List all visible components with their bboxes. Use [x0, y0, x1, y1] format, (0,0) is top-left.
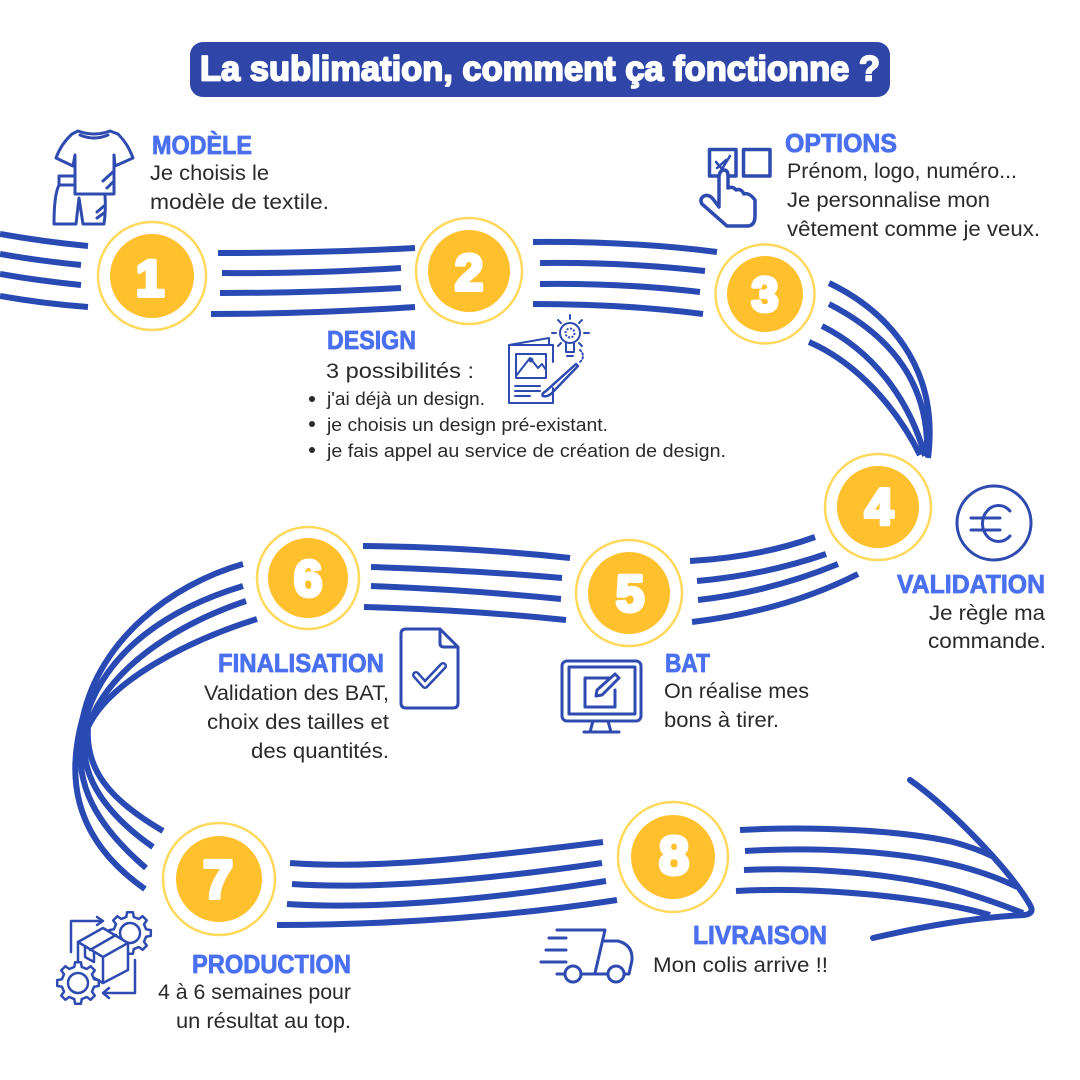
- step 2 badge: 2: [455, 244, 483, 301]
- text: design: je fais appel au service de création de design.: [326, 441, 726, 461]
- text: livraison: Mon colis arrive !!: [653, 954, 828, 977]
- text: finalisation: des quantités.: [251, 740, 389, 763]
- icon: document, brush and light bulb: [509, 315, 589, 403]
- text: finalisation: [204, 648, 389, 763]
- step 6 badge: 6: [294, 550, 322, 607]
- text: livraison: [653, 920, 828, 977]
- text: design: 3 possibilités :: [326, 360, 474, 383]
- step 5 badge: 5: [616, 565, 644, 622]
- step 3 badge: 3: [752, 269, 778, 322]
- text: options: Prénom, logo, numéro...: [787, 160, 1017, 183]
- stripes: step 2 to step 3: [533, 242, 717, 314]
- stripes: curve from step 6 to step 7: [75, 564, 257, 889]
- text: validation: Je règle ma: [929, 602, 1045, 625]
- step 3 badge: [716, 244, 814, 344]
- text: production: 4 à 6 semaines pour: [158, 981, 351, 1004]
- text: options: [785, 128, 1040, 241]
- icon: delivery truck: [541, 930, 632, 982]
- text: finalisation: FINALISATION: [218, 648, 384, 678]
- text: finalisation: Validation des BAT,: [204, 682, 389, 705]
- icon: euro coin: [957, 486, 1031, 560]
- step 4 badge: [825, 454, 931, 560]
- step 7 badge: 7: [203, 850, 233, 910]
- text: production: un résultat au top.: [176, 1010, 351, 1033]
- text: design: DESIGN: [327, 325, 416, 355]
- icon: t-shirt and shorts: [54, 131, 133, 224]
- stripes: curve from step 3 to step 4: [809, 283, 930, 458]
- stripes: step 4 to step 5: [690, 537, 858, 622]
- text: finalisation: choix des tailles et: [207, 711, 389, 734]
- step 4 badge: 4: [865, 478, 894, 535]
- icon: hand pressing checkbox: [701, 150, 770, 226]
- title: [190, 42, 890, 97]
- text: bat: [664, 648, 809, 732]
- text: validation: commande.: [928, 630, 1046, 653]
- text: bat: bons à tirer.: [664, 709, 779, 732]
- title: La sublimation, comment ça fonctionne ?: [200, 50, 880, 88]
- text: design: j'ai déjà un design.: [326, 389, 485, 409]
- text: design: [309, 325, 726, 461]
- step 7 badge: [163, 823, 275, 935]
- icon: box with gears: [57, 912, 151, 1004]
- text: livraison: LIVRAISON: [693, 920, 827, 950]
- stripes: lead-in to step 1: [0, 234, 88, 307]
- text: options: OPTIONS: [785, 128, 897, 158]
- text: options: vêtement comme je veux.: [787, 218, 1040, 241]
- text: modèle: MODÈLE: [152, 130, 252, 160]
- text: modèle: Je choisis le: [150, 162, 269, 185]
- step 6 badge: [257, 527, 359, 629]
- text: modèle: [150, 130, 329, 214]
- text: validation: VALIDATION: [897, 569, 1045, 599]
- step 8 badge: 8: [659, 826, 689, 886]
- text: design: je choisis un design pré-existant.: [326, 415, 608, 435]
- step 1 badge: [98, 222, 206, 330]
- stripes: step 5 to step 6: [363, 546, 570, 620]
- stripes: step 1 to step 2: [211, 248, 415, 314]
- text: bat: BAT: [665, 648, 710, 678]
- text: options: Je personnalise mon: [787, 189, 990, 212]
- step 1 badge: 1: [136, 250, 164, 307]
- text: modèle: modèle de textile.: [150, 191, 329, 214]
- text: bat: On réalise mes: [664, 680, 809, 703]
- step 8 badge: [618, 802, 728, 912]
- icon: monitor with pencil: [562, 661, 641, 732]
- step 5 badge: [576, 540, 682, 646]
- text: production: [158, 949, 351, 1033]
- icon: file with check mark: [401, 629, 458, 708]
- text: production: PRODUCTION: [192, 949, 351, 979]
- stripes: step 7 to step 8: [277, 842, 617, 925]
- arrow: final stripes and arrowhead: [736, 780, 1032, 938]
- step 2 badge: [416, 218, 522, 324]
- text: validation: [897, 569, 1046, 653]
